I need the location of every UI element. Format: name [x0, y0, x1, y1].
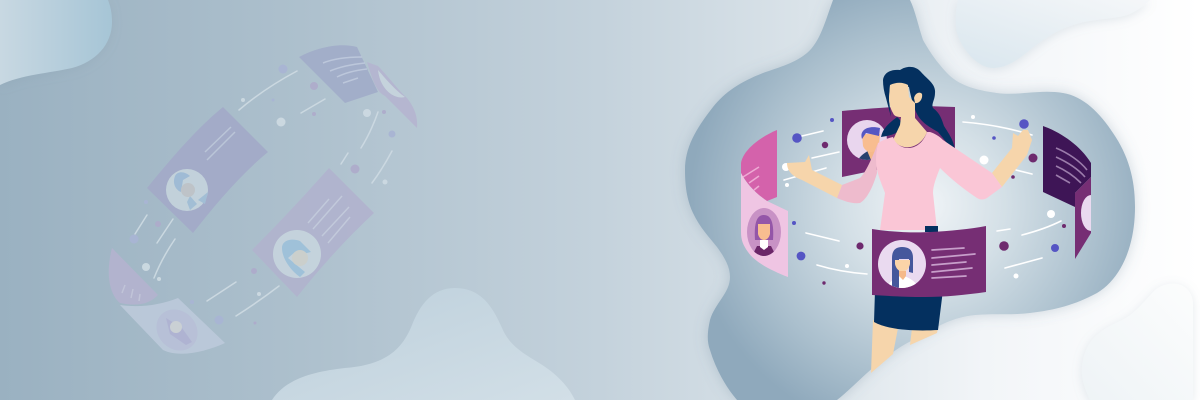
neck and face [889, 83, 927, 147]
blouse [876, 132, 1002, 230]
card: right dark [1043, 126, 1091, 207]
skirt [874, 290, 943, 330]
motion lines [784, 122, 1061, 274]
arm: left sleeve [837, 143, 878, 203]
ghost card: centre right [252, 168, 374, 297]
ghost card: bottom [120, 298, 225, 359]
card: back, behind woman [842, 106, 955, 177]
legs [871, 320, 938, 373]
hair: shoulder lock [881, 117, 902, 137]
card: right purple [1075, 177, 1091, 259]
waistband [925, 226, 938, 232]
blob: bottom centre [272, 288, 575, 400]
avatar: woman [878, 240, 926, 290]
ghost ring of profile cards [109, 45, 417, 359]
blob: top left [0, 0, 112, 85]
hand: left [787, 155, 842, 198]
card: front [872, 226, 986, 297]
ghost card: top right [367, 62, 417, 128]
blob: top right [956, 0, 1150, 68]
ghost dots [130, 64, 396, 324]
ghost motion lines [135, 71, 392, 316]
hand: right [992, 130, 1032, 187]
blob: bottom right [1082, 284, 1193, 400]
ghost card: top left [147, 107, 268, 233]
hair: back [883, 67, 955, 153]
woman figure [787, 67, 1032, 373]
text lines [932, 248, 975, 278]
blob: central opening [685, 0, 1135, 400]
dots [782, 115, 1066, 285]
card: left pink [741, 130, 777, 201]
card: left light [741, 173, 788, 277]
ghost card: top [299, 45, 378, 103]
ghost card: bottom left [109, 248, 158, 305]
ear [914, 93, 922, 103]
